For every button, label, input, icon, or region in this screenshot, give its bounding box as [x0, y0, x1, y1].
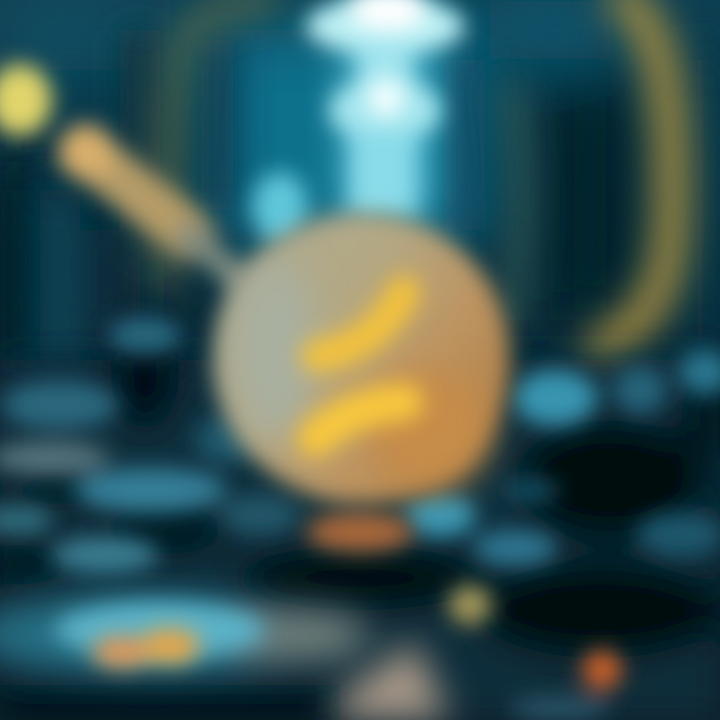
coin stand: [306, 512, 414, 552]
small lights: [448, 585, 622, 720]
orange glow on table: [92, 628, 200, 668]
yellow glowing orb: [0, 64, 52, 136]
lower dark stones: [0, 320, 720, 720]
golden arches: [165, 0, 672, 350]
table surface: [0, 595, 370, 675]
coin symbol: upper stroke: [318, 292, 404, 356]
dark vertical columns: [0, 30, 485, 360]
bottom tan figure: [335, 640, 450, 720]
lower blue stones: [0, 315, 720, 573]
light column: [252, 0, 465, 244]
coin symbol: lower stroke: [316, 402, 404, 438]
comet trail: [58, 124, 240, 280]
coin: [214, 212, 510, 504]
background: upper teal glow: [0, 0, 720, 340]
